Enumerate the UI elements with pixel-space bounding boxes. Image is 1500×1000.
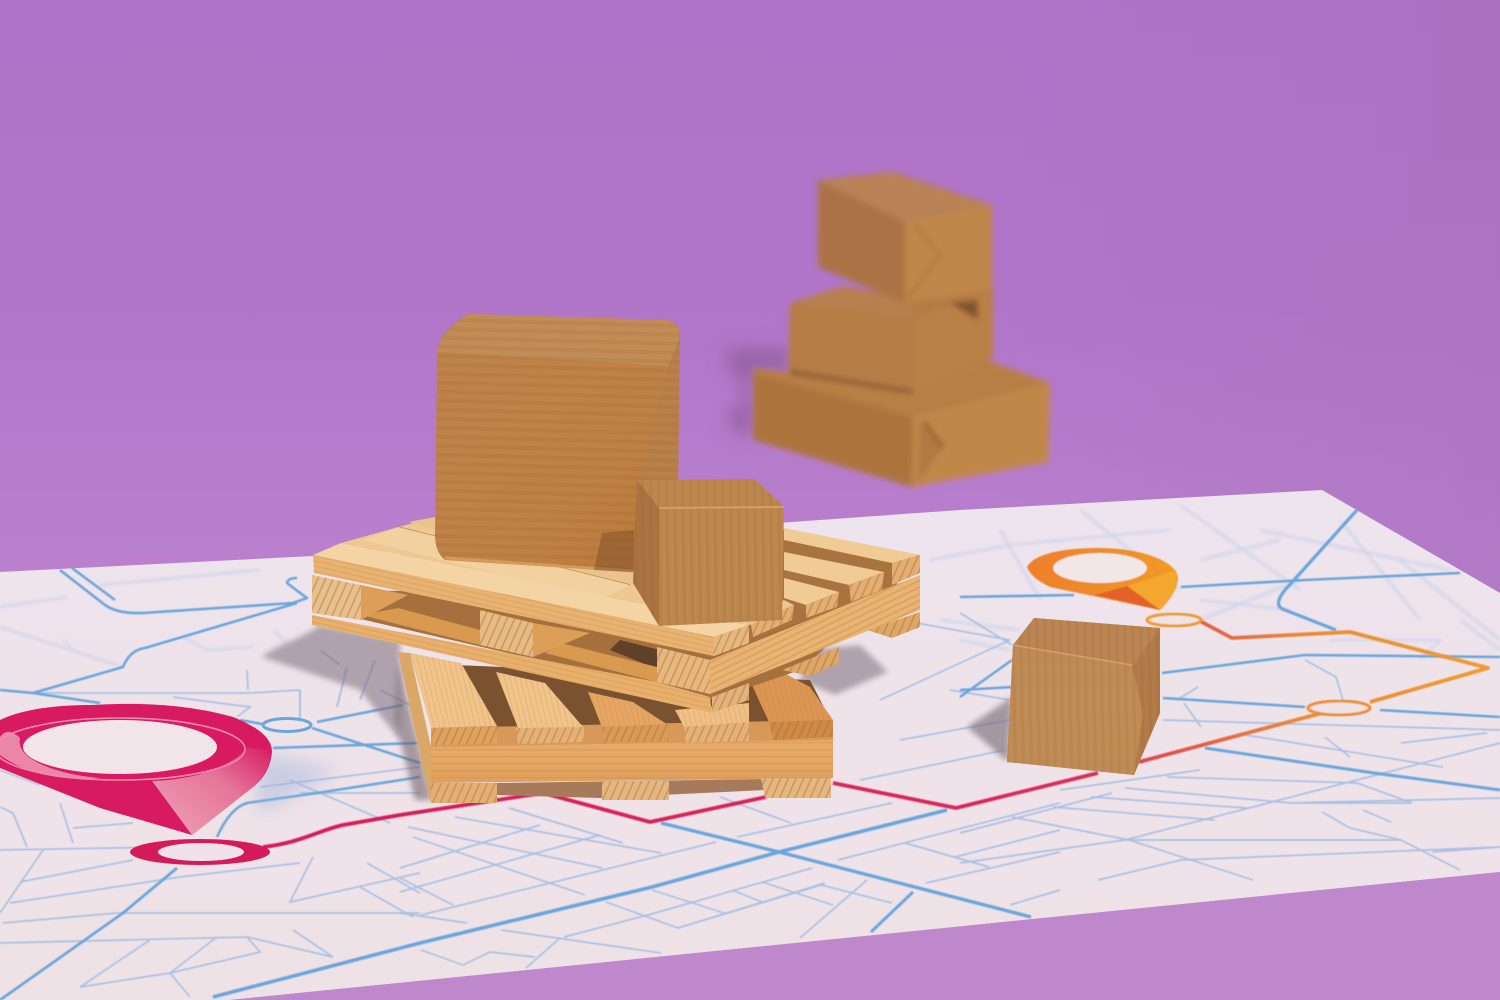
upper pallet interior (330, 590, 880, 700)
upper wooden pallet (312, 517, 920, 713)
top blurred parcel (818, 172, 992, 303)
lower pallet gaps (431, 665, 833, 745)
upper pallet front plank (313, 543, 749, 656)
large kraft parcel (435, 314, 680, 572)
upper pallet deck base, left side (341, 517, 760, 625)
red to orange delivery route (263, 620, 1488, 847)
bottom blurred parcel (753, 360, 1050, 487)
main blue roads (0, 510, 1500, 1000)
route map sheet (0, 490, 1500, 1000)
upper pallet deck boards behind (363, 517, 920, 625)
foreground purple surface (200, 872, 1500, 1000)
upper pallet rear blocks (782, 612, 920, 676)
lower board end (712, 683, 749, 713)
upper pallet lower board (312, 615, 712, 713)
route junction ring on the right (1308, 701, 1370, 715)
lower pallet board ends (431, 720, 833, 746)
icon: red map pin (0, 704, 272, 835)
shadow right of pallets (800, 645, 888, 695)
lower wooden pallet (398, 652, 833, 803)
lower pallet front rail (431, 740, 833, 783)
middle blurred parcel (788, 285, 993, 392)
upper pallet dark gap (610, 640, 660, 670)
upper pallet right rail (710, 575, 920, 694)
lower pallet left edge (398, 652, 431, 803)
small kraft parcel on pallet (633, 479, 784, 626)
shadow of parcel on map (967, 697, 1012, 762)
shadow left of lower pallet (395, 660, 432, 800)
distant faint streets (0, 505, 1500, 667)
upper pallet deck base, right side (735, 525, 920, 640)
near thin map streets (0, 613, 1500, 997)
route junction ring near red pin (130, 839, 270, 865)
route junction ring near orange pin (1147, 614, 1201, 626)
street junction ring (263, 718, 311, 732)
lower pallet feet (431, 778, 831, 803)
lower pallet underside shadow (497, 779, 765, 798)
lower board top faces (361, 608, 657, 682)
upper pallet blocks (312, 575, 710, 694)
map pin shadow (250, 750, 340, 815)
soft shadow behind stack (722, 350, 790, 440)
lower pallet deck boards (410, 653, 833, 728)
lower pallet rail top (431, 720, 833, 748)
upper pallet rear board ends (751, 555, 920, 637)
icon: orange map pin (1027, 548, 1178, 610)
background stack of parcels (722, 172, 1050, 487)
kraft parcel on map (1007, 618, 1160, 775)
shadow under pallets (262, 625, 400, 740)
shadow of small parcel on large parcel (594, 530, 634, 572)
